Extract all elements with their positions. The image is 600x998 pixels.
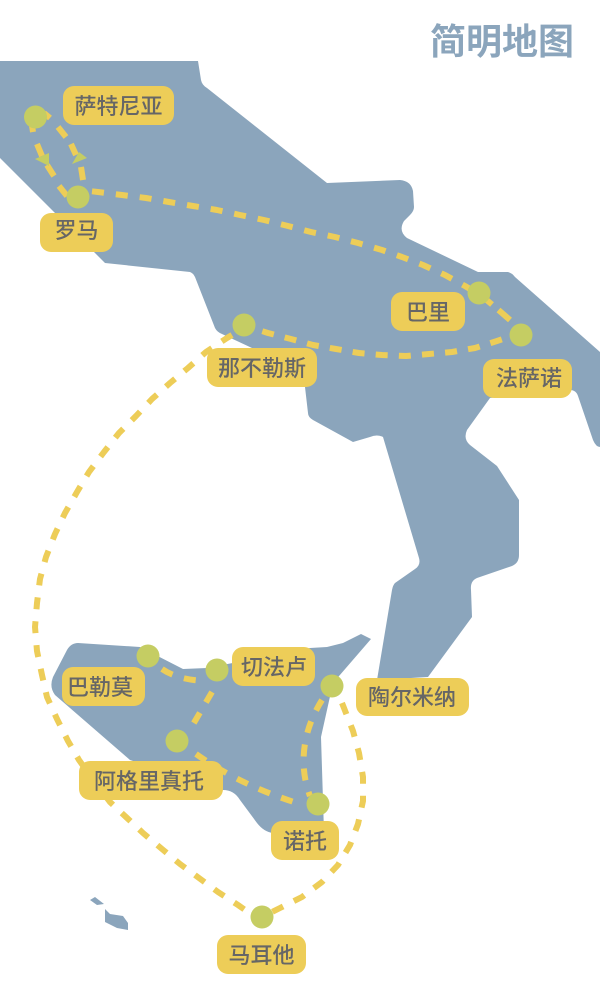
stop: Malta (250, 906, 274, 928)
label: Fasano: 法萨诺 (496, 366, 562, 391)
arrow: to Sardinia (72, 152, 87, 164)
route: Rome to Sardinia (44, 113, 83, 180)
label: Rome (40, 213, 113, 252)
label: Sardinia: 萨特尼亚 (74, 94, 163, 119)
stop: Naples (232, 314, 256, 336)
label: Taormina: 陶尔米纳 (368, 685, 456, 710)
stop: Fasano (510, 324, 532, 346)
stop: Noto (306, 792, 330, 816)
label: Malta: 马耳他 (228, 943, 295, 968)
map: Sicily (51, 634, 371, 833)
map: mainland Italy (0, 61, 600, 680)
label: Sardinia (63, 86, 174, 125)
label: Bari: 巴里 (406, 300, 450, 325)
route: Agrigento to Cefalu (188, 692, 212, 733)
label: Cefalu (232, 647, 315, 686)
label: Noto (271, 821, 339, 860)
route: Sardinia to Rome (32, 122, 67, 196)
label: Palermo: 巴勒莫 (67, 675, 133, 700)
route: Cefalu to Palermo (162, 669, 206, 681)
label: Naples: 那不勒斯 (218, 356, 306, 381)
route: Fasano to Naples (262, 331, 503, 356)
arrow: to Rome (35, 153, 49, 166)
label: Cefalu: 切法卢 (241, 655, 307, 680)
label: Naples (207, 348, 317, 387)
stop: Palermo (136, 644, 160, 668)
label: Agrigento: 阿格里真托 (94, 769, 204, 794)
route: Bari to Fasano (483, 297, 510, 320)
label: Rome: 罗马 (54, 218, 99, 243)
stop: Rome (66, 186, 90, 208)
route: Malta to Taormina (270, 703, 363, 913)
route: Taormina to Noto (304, 700, 322, 796)
label: Agrigento (79, 761, 223, 800)
stop: Bari (468, 282, 490, 304)
route: Naples to Malta (35, 335, 248, 912)
stop: Taormina (320, 674, 344, 698)
route: Rome to Bari (92, 191, 475, 292)
stop: Sardinia (24, 106, 47, 128)
label: Malta (217, 935, 306, 974)
label: Fasano (483, 359, 572, 398)
label: Palermo (62, 667, 145, 706)
label: Bari (391, 292, 465, 331)
label: Taormina (356, 678, 469, 716)
stop: Agrigento (166, 730, 188, 752)
stop: Cefalu (206, 658, 228, 682)
label: Noto: 诺托 (283, 829, 327, 854)
title: 简明地图 (430, 21, 574, 62)
map: Malta (90, 897, 128, 930)
route: Noto to Agrigento (196, 754, 297, 803)
